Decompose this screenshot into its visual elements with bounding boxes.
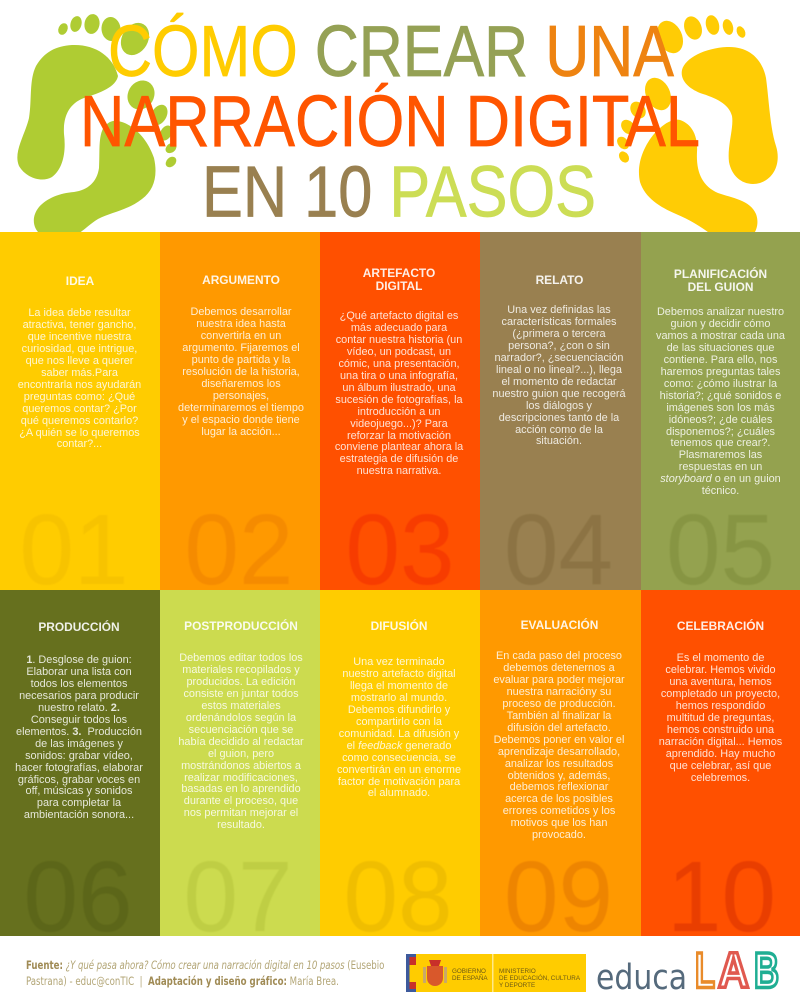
body text: planificación del guion: imágenes son los más [666, 402, 775, 414]
body text: relato: descripciones tanto de la [499, 412, 619, 424]
body text: planificación del guion: Debemos analizar nuestro [657, 306, 784, 318]
body text: relato: acción como de la [515, 424, 603, 436]
body text: celebración: celebrar. Hemos vivido [665, 664, 776, 676]
body text: idea: curiosidad, que intrigue, [22, 343, 137, 355]
body text: artefacto digital: introducción a un [358, 406, 440, 418]
body text: evaluación: Debemos poner en valor el [494, 734, 624, 746]
body text: celebración: celebremos. [691, 772, 750, 784]
body text: postproducción: había decidido al redactar [178, 736, 304, 748]
heading: postproducción: POSTPRODUCCIÓN [184, 619, 298, 633]
body text: difusión: como consecuencia, se [342, 752, 456, 764]
panel: 03 artefacto digital [320, 232, 480, 590]
body text: celebración: una aventura, hemos [669, 676, 772, 688]
logo: gobierno de españa: GOBIERNO [452, 968, 486, 975]
body text: difusión: el feedback generado [347, 740, 451, 752]
logo: gobierno de españa: Y DEPORTE [499, 982, 535, 989]
body text: relato: narrador?, ¿secuenciación [495, 352, 623, 364]
body text: relato [492, 304, 626, 447]
body text: argumento: diseñaremos los [201, 378, 281, 390]
body text: evaluación: motivos que los han [511, 817, 607, 829]
body text: artefacto digital: cómic, una presentación, [338, 358, 460, 370]
body text: evaluación: proceso de producción. [502, 698, 616, 710]
body text: relato: (¿primera o tercera [512, 328, 606, 340]
heading: planificación del guion: PLANIFICACIÓN [674, 266, 767, 280]
body text: celebración: aprendido. Hay mucho [666, 748, 775, 760]
body text: evaluación: obtenidos y, además, [508, 770, 610, 782]
body text: artefacto digital: más adecuado para [351, 322, 447, 334]
body text: idea: La idea debe resultar [28, 307, 131, 319]
body text: celebración: hemos construido una [667, 724, 774, 736]
body text: idea: queremos contar? ¿Por [22, 403, 137, 415]
body text: difusión: compartirlo con la [356, 716, 442, 728]
body text: postproducción: nos permitan mejorar el [184, 807, 298, 819]
body text: argumento: punto de partida y la [192, 354, 290, 366]
body text: postproducción: resultado. [217, 819, 265, 831]
body text: producción: gráficos, grabar voces en [18, 774, 140, 786]
body text: difusión: Debemos difundirlo y [348, 704, 450, 716]
body text: postproducción: mostrándonos abiertos a [181, 760, 301, 772]
body text: planificación del guion: contiene. Para ello, nos [664, 354, 777, 366]
body text: artefacto digital: contar nuestra historia (un [336, 334, 462, 346]
body text: idea [18, 307, 141, 450]
footer: source credits: Pastrana) - educ@conTIC | Adaptación y diseño gráfico: María Brea. [26, 974, 339, 988]
body text: argumento: y el espacio donde tiene [182, 414, 300, 426]
panel: 02 argumento [160, 232, 320, 590]
body text: celebración: hemos respondido [676, 700, 765, 712]
body text: evaluación: aprendizaje desarrollado, [498, 746, 620, 758]
body text: postproducción: secuenciación que se [189, 724, 293, 736]
body text: planificación del guion: tenemos que crear?. [671, 437, 770, 449]
body text: celebración: multitud de preguntas, [667, 712, 774, 724]
panel: 09 evaluación [480, 590, 641, 936]
body text: producción: de las imágenes y [35, 738, 123, 750]
body text: postproducción: ordenándolos según la [186, 712, 296, 724]
body text: difusión: el alumnado. [368, 787, 430, 799]
body text: planificación del guion: Plasmaremos las [679, 449, 762, 461]
body text: producción: todos los elementos [31, 678, 127, 690]
body text: evaluación: En cada paso del proceso [496, 650, 622, 662]
icon: coat of arms [423, 960, 447, 986]
body text: producción: elementos. 3. Producción [16, 726, 142, 738]
body text: celebración: Es el momento de [677, 652, 764, 664]
body text: evaluación: provocado. [532, 829, 586, 841]
body text: difusión: factor de motivación para [338, 776, 460, 788]
body text: postproducción: materiales recopilados y [182, 664, 300, 676]
body text: postproducción: Debemos editar todos los [179, 652, 303, 664]
body text: producción: para completar la [37, 797, 121, 809]
body text: planificación del guion: haremos preguntas tales [661, 366, 780, 378]
heading: planificación del guion [674, 266, 767, 294]
heading: artefacto digital: DIGITAL [376, 279, 422, 293]
body text: idea: contar?... [57, 438, 102, 450]
body text: planificación del guion: disponemos?; ¿cuáles [666, 426, 775, 438]
body text: evaluación: analizar los resultados [505, 758, 613, 770]
body text: artefacto digital: un álbum ilustrado, una [342, 382, 456, 394]
heading: argumento: ARGUMENTO [202, 273, 280, 287]
body text: idea: que nos lleve a querer [26, 355, 133, 367]
body text: evaluación: nuestra narracióny su [507, 686, 611, 698]
body text: producción: necesarios para producir [19, 690, 139, 702]
body text: planificación del guion: vamos a mostrar cada una [656, 330, 785, 342]
body text: artefacto digital: vídeo, un podcast, un [347, 346, 451, 358]
title: NARRACIÓN DIGITAL [80, 82, 700, 162]
body text: idea: ¿A quién se lo queremos [19, 427, 140, 439]
footprints: green [17, 14, 176, 232]
footer: source credits [26, 958, 384, 988]
logo: gobierno de españa: DE ESPAÑA [452, 973, 488, 982]
body text: difusión: mostrarlo al mundo. [351, 692, 447, 704]
body text: evaluación: difusión del artefacto. [507, 722, 611, 734]
title: CÓMO CREAR UNA [108, 12, 674, 92]
body text: difusión: convertirán en un enorme [337, 764, 461, 776]
body text: producción: sonidos: grabar vídeo, [25, 750, 133, 762]
body text: artefacto digital: estrategia de difusión de [340, 453, 458, 465]
body text: artefacto digital: reforzar la motivación [347, 430, 451, 442]
logo: gobierno de españa [406, 954, 586, 992]
body text: producción: nuestro relato. 2. [38, 702, 120, 714]
body text: relato: los diálogos y [526, 400, 592, 412]
footer: source credits: Fuente: ¿Y qué pasa ahora? Cómo crear una narración digital en 10 pasos (Eusebio [26, 958, 384, 972]
body text: planificación del guion: storyboard o en un guion [660, 473, 781, 485]
logo: gobierno de españa: MINISTERIO [499, 968, 536, 975]
body text: producción [15, 654, 143, 821]
body text: evaluación: debemos detenernos a [503, 662, 615, 674]
heading: artefacto digital: ARTEFACTO [363, 266, 435, 280]
footprints: yellow [617, 15, 778, 232]
body text: argumento: lugar la acción... [201, 426, 281, 438]
body text: artefacto digital: videojuego...)? Para [350, 418, 448, 430]
body text: evaluación: errores cometidos y los [503, 805, 615, 817]
body text: relato: persona?, ¿con o sin [508, 340, 610, 352]
panel: 07 postproducción [160, 590, 320, 936]
body text: planificación del guion: idóneos?; ¿de cuáles [669, 414, 772, 426]
logo: educaLAB [596, 948, 779, 996]
body text: relato: Una vez definidas las [507, 304, 611, 316]
body text: argumento: nuestra idea hasta [196, 318, 286, 330]
body text: argumento: resolución de la historia, [182, 366, 300, 378]
title [80, 12, 700, 232]
body text: artefacto digital: conviene plantear ahora la [335, 441, 463, 453]
body text: producción: hacer fotografías, elaborar [15, 762, 143, 774]
body text: producción: Conseguir todos los [31, 714, 127, 726]
body text: postproducción: consiste en juntar todos [183, 688, 299, 700]
body text: evaluación: debemos reflexionar [510, 781, 608, 793]
body text: producción: Elaborar una lista con [26, 666, 132, 678]
body text: planificación del guion: respuestas en un [679, 461, 762, 473]
logo: gobierno de españa: DE EDUCACIÓN, CULTURA [499, 973, 581, 982]
body text: postproducción [178, 652, 304, 831]
body text: artefacto digital: nuestra narrativa. [357, 465, 441, 477]
body text: producción: 1. Desglose de guion: [26, 654, 132, 666]
body text: difusión: llega el momento de [350, 680, 448, 692]
panel: 10 celebración [641, 590, 800, 936]
body text: planificación del guion: guion y decidir cómo [671, 318, 770, 330]
body text: relato: características formales [502, 316, 616, 328]
panel: 06 producción [0, 590, 160, 936]
heading: artefacto digital [363, 266, 435, 293]
body text: producción: off, músicas y sonidos [26, 785, 132, 797]
panel: 04 relato [480, 232, 641, 590]
body text: idea: que incentive nuestra [28, 331, 131, 343]
body text: evaluación: acerca de los posibles [505, 793, 613, 805]
body text: celebración: completado un proyecto, [661, 688, 780, 700]
body text: planificación del guion: historia?; ¿qué sonidos e [660, 390, 781, 402]
panel: 05 planificación del guion [641, 232, 800, 590]
body text: evaluación: También al finalizar la [507, 710, 611, 722]
body text: planificación del guion [656, 306, 785, 497]
body text: postproducción: realizar modificaciones, [184, 772, 298, 784]
body text: postproducción: durante el proceso, que [184, 795, 298, 807]
body text: argumento: determinaremos el tiempo [178, 402, 304, 414]
heading: celebración: CELEBRACIÓN [677, 619, 764, 633]
body text: planificación del guion: como: ¿cómo ilustrar la [664, 378, 777, 390]
body text: postproducción: el guion, pero [208, 748, 274, 760]
body text: idea: qué queremos contarlo? [21, 415, 138, 427]
body text: idea: atractiva, tener gancho, [23, 319, 136, 331]
body text: evaluación: evaluar para poder mejorar [493, 674, 625, 686]
panel: 01 idea [0, 232, 160, 590]
body text: difusión: nuestro artefacto digital [342, 668, 456, 680]
body text: idea: preguntas como: ¿Qué [24, 391, 135, 403]
body text: difusión [337, 656, 461, 799]
body text: relato: situación. [536, 435, 582, 447]
body text: postproducción: producidos. La edición [186, 676, 295, 688]
panel: 08 difusión [320, 590, 480, 936]
body text: difusión: comunidad. La difusión y [339, 728, 459, 740]
heading: idea: IDEA [66, 274, 94, 288]
heading: difusión: DIFUSIÓN [371, 619, 427, 633]
heading: producción: PRODUCCIÓN [38, 620, 120, 634]
body text: postproducción: estos materiales [201, 700, 281, 712]
body text: postproducción: basadas en lo aprendido [181, 783, 301, 795]
body text: producción: ambientación sonora... [24, 809, 134, 821]
body text: celebración [659, 652, 782, 784]
body text: artefacto digital: ¿Qué artefacto digital es [340, 310, 458, 322]
body text: evaluación [493, 650, 625, 841]
body text: artefacto digital: sucesión de fotografías, la [335, 394, 463, 406]
body text: argumento: convertirla en un [201, 330, 281, 342]
heading: evaluación: EVALUACIÓN [521, 618, 598, 632]
heading: relato: RELATO [536, 272, 583, 286]
body text: argumento: personajes, [213, 390, 269, 402]
body text: idea: encontrarla nos ayudarán [18, 379, 141, 391]
body text: argumento [178, 306, 304, 438]
body text: celebración: narración digital... Hemos [659, 736, 782, 748]
body text: argumento: Debemos desarrollar [190, 306, 292, 318]
heading: planificación del guion: DEL GUION [688, 280, 753, 294]
body text: argumento: argumento. Fijaremos el [182, 342, 300, 354]
body text: relato: nuestro guion que recogerá [492, 388, 626, 400]
body text: planificación del guion: técnico. [702, 485, 739, 497]
body text: difusión: Una vez terminado [353, 656, 445, 668]
title: EN 10 PASOS [202, 152, 596, 232]
body text: relato: lineal o no lineal?...), llega [496, 364, 622, 376]
body text: relato: el momento de redactar [501, 376, 617, 388]
body text: artefacto digital [335, 310, 464, 477]
body text: celebración: que celebrar, así que [670, 760, 771, 772]
body text: artefacto digital: una tira o una infografía, [340, 370, 458, 382]
body text: planificación del guion: de las situaciones que [667, 342, 774, 354]
body text: idea: saber más.Para [41, 367, 118, 379]
